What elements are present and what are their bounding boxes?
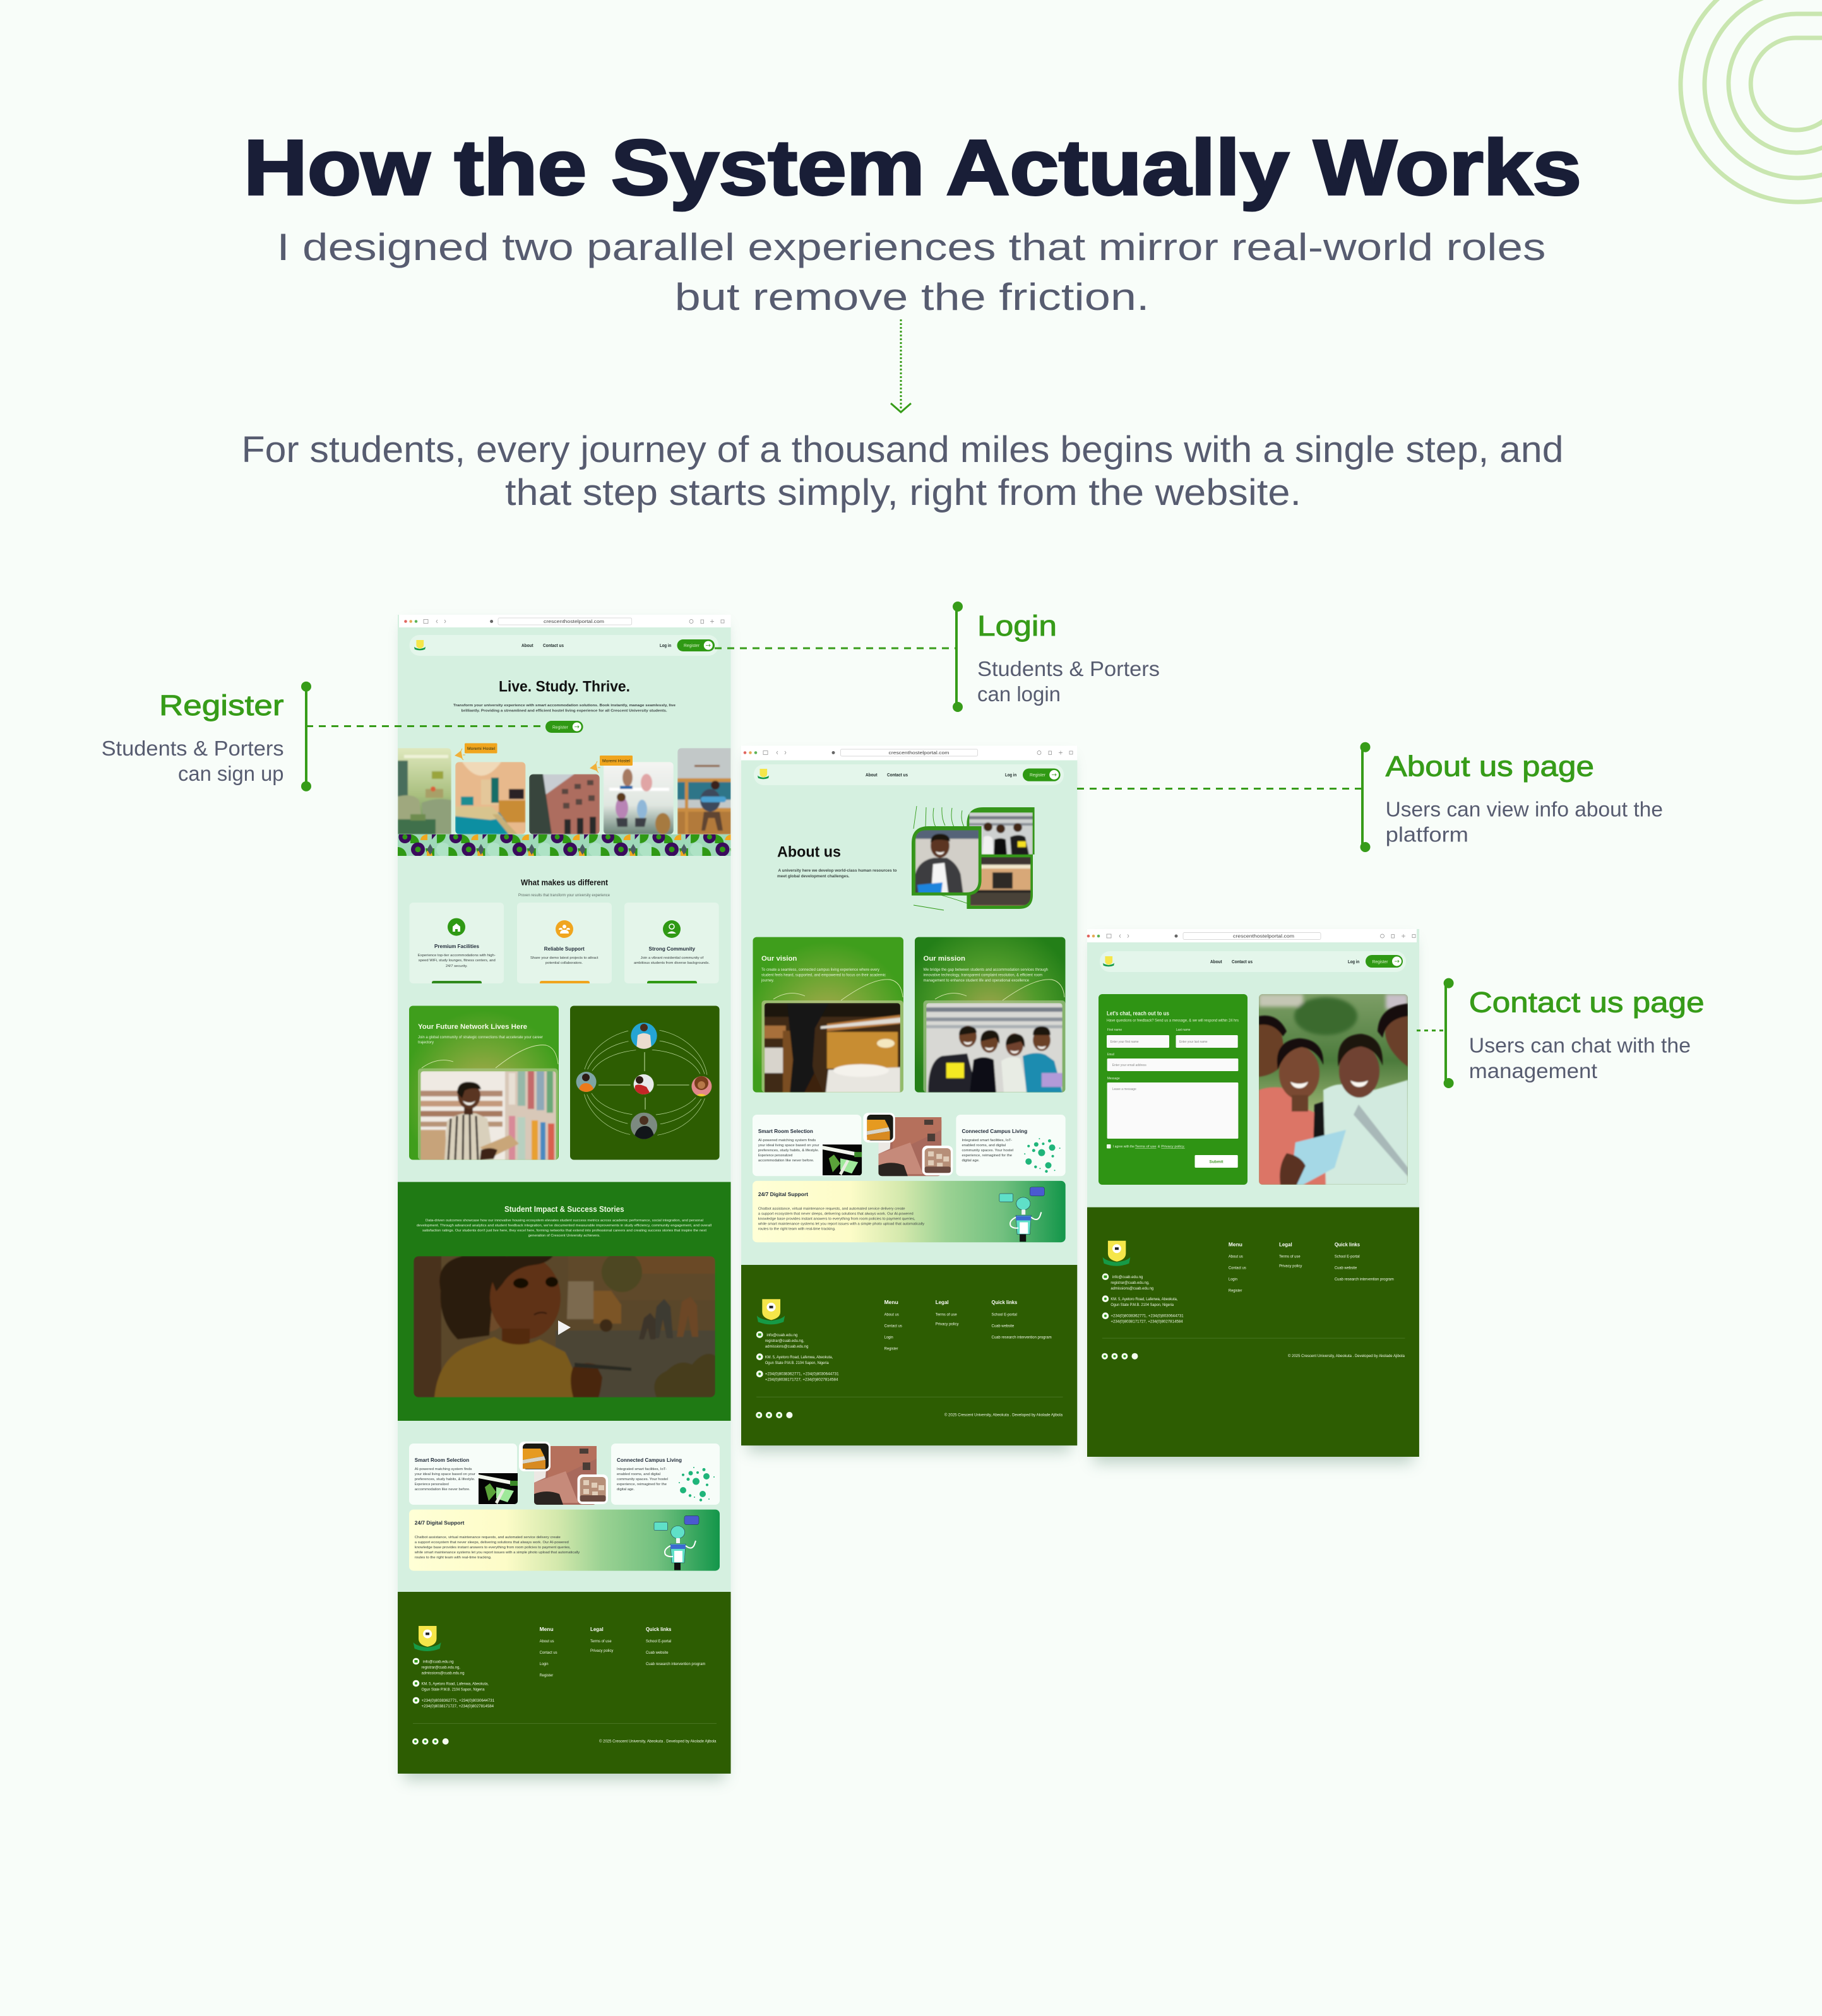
hero register button (545, 721, 583, 733)
pattern band (398, 834, 731, 856)
card: smart room selection (753, 1115, 862, 1176)
about photo collage (912, 806, 1035, 910)
photo: smiling students (1259, 994, 1408, 1185)
callout: about us page: Users can view info about the (1386, 798, 1663, 821)
callout: about us page: About us page (1386, 750, 1594, 783)
card: connected campus living: digital age. (962, 1159, 980, 1163)
card: premium facilities: Premium Facilities (434, 944, 480, 949)
contact form: Enter your last name (1179, 1040, 1208, 1044)
contact form: Terms of use (1135, 1145, 1157, 1149)
card: smart room selection: Smart Room Selection (415, 1457, 469, 1463)
card: connected campus living: experience, reimagined for the (962, 1154, 1012, 1158)
subtitle: but remove the friction. (675, 276, 1150, 318)
about text (777, 869, 897, 879)
footer (1087, 1207, 1419, 1457)
footer contact details: registrar@cuab.edu.ng, (765, 1339, 804, 1343)
card: 24/7 digital support: while smart maintenance systems let you report issues with a simple photo upload that automatically (414, 1551, 580, 1555)
card: our mission (915, 937, 1066, 1093)
footer menu links: Login (1229, 1278, 1237, 1282)
feature band (753, 1113, 1066, 1242)
tag: Moremi Hostel second: Moremi Hostel (602, 759, 630, 764)
contact form (1099, 994, 1247, 1185)
card: smart room selection: AI-powered matching system finds (758, 1139, 816, 1142)
card: our vision: journey. (761, 979, 774, 983)
footer menu links: Terms of use (590, 1639, 612, 1644)
image collage (863, 1113, 953, 1176)
about text: A university here we develop world-class human resources to (778, 869, 897, 873)
card: 24/7 digital support: routes to the right team with real-time tracking. (758, 1228, 836, 1231)
contact form: Last name (1176, 1028, 1191, 1032)
card: premium facilities: speed WiFi, study lounges, fitness centers, and (419, 959, 496, 963)
footer contact details (756, 1331, 839, 1382)
about heading: About us (777, 843, 841, 861)
contact form: & (1158, 1145, 1160, 1149)
panel: contact page mockup (1087, 929, 1419, 1463)
card: strong community: Strong Community (649, 946, 696, 952)
contact form: Enter your first name (1110, 1040, 1139, 1044)
hero text (453, 704, 676, 713)
card: network diagram (570, 1006, 720, 1160)
footer menu links: Privacy policy (936, 1322, 959, 1326)
card: smart room selection: accommodation like never before. (758, 1159, 814, 1163)
card: smart room selection: preferences, study habits, & lifestyle. (415, 1478, 475, 1481)
card: connected campus living (611, 1444, 720, 1505)
card: your future network: Your Future Network Lives Here (418, 1023, 527, 1031)
card: connected campus living: experience, reimagined for the (617, 1483, 667, 1486)
contact form: Privacy policy. (1161, 1145, 1185, 1149)
footer menu links: Contact us (1229, 1266, 1246, 1271)
hero register button: Register (552, 726, 569, 730)
section: student impact: satisfaction ratings. Our students don't just live here, they excel here, forming networks that extend into professional careers and creating success stories that inspire the next (422, 1229, 707, 1233)
section: student impact: Student Impact & Success Stories (504, 1205, 624, 1214)
card: smart room selection (409, 1444, 518, 1505)
card: connected campus living: community spaces. Your hostel (962, 1149, 1013, 1153)
card: our mission: Our mission (923, 955, 965, 963)
card: our mission: management to enhance student life and operational excellence (923, 979, 1030, 983)
footer menu links: Cuab research intervention program (1335, 1278, 1394, 1282)
navigation bar: Log in (1348, 959, 1360, 964)
footer social icons (412, 1738, 449, 1745)
card: reliable support (517, 903, 612, 983)
footer contact details: Ogun State P.M.B. 2104 Sapon, Nigeria (1110, 1303, 1174, 1307)
card: 24/7 digital support: 24/7 Digital Support (758, 1191, 808, 1197)
hero text: Transform your university experience with smart accommodation solutions. Book instantly, manage seamlessly, live (453, 704, 676, 708)
contact form: Let's chat, reach out to us (1107, 1010, 1169, 1016)
footer menu links: Register (884, 1347, 898, 1351)
footer (741, 1265, 1077, 1445)
footer social icons (1102, 1353, 1138, 1360)
hostel photo strip (398, 748, 731, 834)
feature band (409, 1442, 720, 1571)
footer menu links: Quick links (1335, 1242, 1361, 1248)
contact form: Enter your email address (1112, 1064, 1146, 1067)
navigation bar: Log in (1005, 772, 1017, 778)
footer contact details: admissions@cuab.edu.ng (765, 1344, 809, 1349)
callout: login: can login (977, 682, 1061, 706)
footer contact details: info@cuab.edu.ng (766, 1333, 798, 1337)
footer contact details: KM. 5, Ayetoro Road, Lafenwa, Abeokuta, (1110, 1297, 1178, 1302)
card: premium facilities: Experience top-tier accommodations with high- (418, 954, 496, 958)
navigation bar: Register (1030, 773, 1046, 778)
section: student impact (398, 1182, 731, 1421)
card: connected campus living: Connected Campus Living (962, 1128, 1027, 1134)
card: strong community: Join a vibrant residential community of (641, 956, 704, 960)
card: connected campus living: Integrated smart facilities, IoT- (962, 1139, 1012, 1142)
footer copyright: © 2025 Crescent University, Abeokuta . Developed by Akolade Ajibola (1288, 1354, 1405, 1358)
section heading: what makes us different (518, 879, 610, 898)
footer menu links: Register (540, 1673, 553, 1678)
callout: login: Students & Porters (977, 657, 1160, 680)
callout: about us page: platform (1386, 823, 1468, 846)
footer menu links: Cuab website (1335, 1266, 1357, 1271)
footer menu links: Contact us (884, 1324, 902, 1328)
footer menu links: Quick links (646, 1627, 672, 1632)
title: How the System Actually Works (244, 124, 1581, 211)
tag: Moremi Hostel: Moremi Hostel (467, 747, 495, 751)
footer logo (414, 1626, 441, 1651)
navigation bar: About (521, 643, 533, 648)
card: our vision: To create a seamless, connected campus living experience where every (761, 968, 879, 972)
footer contact details: +234(0)8038171727, +234(0)8027814584 (1110, 1320, 1183, 1324)
footer (398, 1592, 731, 1774)
footer menu links: Legal (590, 1627, 604, 1632)
callout: contact us page: Users can chat with the (1469, 1033, 1691, 1057)
contact form: I agree with the (1113, 1145, 1134, 1149)
footer contact details: Ogun State P.M.B. 2104 Sapon, Nigeria (765, 1361, 829, 1365)
intro text for students (241, 429, 1563, 513)
footer menu links: About us (1229, 1255, 1243, 1259)
card: 24/7 digital support: Chatbot assistance, virtual maintenance requests, and automated service delivery create (758, 1207, 905, 1211)
panel: register page mockup (398, 615, 731, 1780)
section heading: what makes us different: What makes us different (521, 879, 609, 887)
footer copyright: © 2025 Crescent University, Abeokuta . Developed by Akolade Ajibola (599, 1740, 717, 1743)
footer contact details: +234(0)8038171727, +234(0)8027814584 (765, 1378, 838, 1382)
section: student impact: Data-driven outcomes showcase how our innovative housing ecosystem elevates student success metrics across academic performance, social integration, and personal (426, 1219, 703, 1223)
card: smart room selection: AI-powered matching system finds (415, 1468, 472, 1471)
card: strong community: ambitious students from diverse backgrounds. (634, 961, 710, 965)
footer contact details: admissions@cuab.edu.ng (1110, 1286, 1154, 1291)
card: smart room selection: preferences, study habits, & lifestyle. (758, 1149, 819, 1153)
card: 24/7 digital support: knowledge base provides instant answers to everything from room policies to payment queries, (758, 1218, 915, 1221)
footer menu links (540, 1627, 705, 1678)
card: premium facilities: 24/7 security. (446, 964, 468, 968)
panel: about page mockup (741, 746, 1077, 1452)
footer contact details (1102, 1273, 1184, 1324)
footer logo (1103, 1241, 1130, 1266)
footer menu links: Menu (1229, 1242, 1242, 1248)
card: connected campus living: community spaces. Your hostel (617, 1478, 668, 1481)
footer menu links: Cuab research intervention program (992, 1335, 1052, 1339)
footer contact details: registrar@cuab.edu.ng, (1110, 1281, 1150, 1285)
footer menu links (1229, 1242, 1394, 1293)
arrow: dotted down (891, 319, 911, 412)
card: 24/7 digital support (409, 1510, 720, 1571)
footer menu links: Menu (540, 1627, 554, 1632)
card: our vision (753, 937, 903, 1093)
card: 24/7 digital support: a support ecosystem that never sleeps, delivering solutions that always work. Our AI-powered (415, 1541, 569, 1545)
card: your future network (409, 1006, 559, 1160)
navigation bar: Contact us (887, 772, 908, 778)
section heading: what makes us different: Proven results that transform your university experience (518, 894, 610, 898)
callout: register: Register (159, 689, 284, 721)
navigation bar: Register (1372, 960, 1388, 964)
footer social icons (756, 1412, 792, 1418)
card: reliable support: Share your demo latest projects to attract (530, 956, 598, 960)
image collage (519, 1442, 608, 1505)
footer contact details: KM. 5, Ayetoro Road, Lafenwa, Abeokuta, (422, 1681, 489, 1687)
card: connected campus living: Integrated smart facilities, IoT- (617, 1468, 667, 1471)
hero text: brilliantly. Providing a streamlined and efficient hostel living experience for all Crescent University students. (461, 709, 667, 713)
footer contact details: admissions@cuab.edu.ng (422, 1671, 465, 1675)
footer menu links: Login (884, 1335, 893, 1339)
footer menu links: Contact us (540, 1651, 557, 1655)
contact form: Leave a message (1112, 1088, 1136, 1091)
footer menu links (884, 1300, 1052, 1351)
footer contact details: registrar@cuab.edu.ng, (422, 1665, 460, 1670)
footer menu links: Cuab website (992, 1324, 1015, 1328)
card: connected campus living: enabled rooms, and digital (617, 1473, 660, 1476)
card: 24/7 digital support: routes to the right team with real-time tracking. (415, 1556, 492, 1560)
card: your future network: trajectory (418, 1041, 434, 1045)
icon: robot (999, 1187, 1044, 1242)
footer menu links: Login (540, 1662, 549, 1666)
navigation bar: About (1210, 959, 1222, 964)
section: student impact: generation of Crescent University achievers. (528, 1234, 600, 1238)
card: 24/7 digital support (753, 1181, 1066, 1242)
card: reliable support: Reliable Support (544, 946, 585, 952)
footer menu links: School E-portal (992, 1312, 1017, 1317)
navigation bar (1100, 951, 1406, 972)
callout: about us page (1077, 742, 1663, 852)
footer logo (757, 1299, 785, 1324)
footer contact details: info@cuab.edu.ng (1112, 1275, 1143, 1279)
card: smart room selection: Experience personalized (758, 1154, 792, 1158)
card: 24/7 digital support: a support ecosystem that never sleeps, delivering solutions that always work. Our AI-powered (758, 1212, 914, 1216)
contact form: First name (1107, 1028, 1122, 1032)
tag: Moremi Hostel (455, 744, 497, 760)
card: connected campus living: enabled rooms, and digital (962, 1144, 1006, 1147)
footer menu links: Privacy policy (1279, 1264, 1302, 1269)
footer menu links: Privacy policy (590, 1649, 614, 1653)
navigation bar: Contact us (543, 643, 564, 648)
card: our vision: Our vision (761, 955, 797, 963)
subtitle: I designed two parallel experiences that mirror real-world roles (277, 226, 1545, 268)
browser bar (1087, 929, 1417, 942)
browser bar: crescenthostelportal.com (889, 751, 950, 756)
browser bar: crescenthostelportal.com (544, 620, 604, 624)
card: 24/7 digital support: while smart maintenance systems let you report issues with a simple photo upload that automatically (758, 1223, 924, 1226)
card: premium facilities (409, 903, 504, 983)
navigation bar: Contact us (1232, 959, 1253, 964)
navigation bar (754, 764, 1064, 785)
footer menu links: Cuab website (646, 1651, 669, 1655)
browser bar (741, 746, 1077, 760)
callout: login (715, 602, 1160, 712)
footer contact details: +234(0)8038362771, +234(0)8030644731 (1110, 1314, 1184, 1319)
footer menu links: Terms of use (936, 1312, 957, 1317)
about text: meet global development challenges. (777, 874, 850, 879)
card: our mission: innovative technology, transparent complaint resolution, & efficient room (923, 973, 1042, 977)
card: 24/7 digital support: 24/7 Digital Support (415, 1519, 465, 1526)
card: strong community (624, 903, 719, 983)
callout: register (102, 682, 545, 792)
section: student impact: development. Through advanced analytics and student feedback integration, we've documented measurable improvements in study efficiency, community engagement, and overall (417, 1224, 712, 1228)
callout: register: Students & Porters (102, 737, 284, 760)
callout: contact us page: management (1469, 1059, 1597, 1082)
navigation bar: Log in (660, 643, 672, 648)
footer contact details (413, 1658, 495, 1709)
callout: register: can sign up (178, 762, 284, 785)
subtitle (277, 226, 1545, 318)
card: smart room selection: accommodation like never before. (415, 1488, 470, 1491)
browser bar: crescenthostelportal.com (1233, 934, 1294, 939)
footer menu links: Terms of use (1279, 1255, 1301, 1259)
footer contact details: info@cuab.edu.ng (423, 1660, 454, 1664)
card: connected campus living: digital age. (617, 1488, 634, 1491)
contact form: Submit (1210, 1160, 1224, 1164)
browser bar (399, 615, 731, 627)
card: our mission: We bridge the gap between students and accommodation services through (923, 968, 1048, 972)
card: 24/7 digital support: knowledge base provides instant answers to everything from room policies to payment queries, (415, 1546, 571, 1550)
contact form: Have questions or feedback? Send us a message, & we will respond within 24 hrs (1107, 1019, 1239, 1023)
footer menu links: Legal (936, 1300, 949, 1305)
callout: contact us page (1417, 978, 1705, 1088)
footer contact details: +234(0)8038171727, +234(0)8027814584 (422, 1704, 494, 1709)
tag: Moremi Hostel second (590, 756, 633, 773)
footer menu links: School E-portal (1335, 1255, 1360, 1259)
footer contact details: Ogun State P.M.B. 2104 Sapon, Nigeria (422, 1688, 485, 1692)
footer menu links: School E-portal (646, 1639, 671, 1644)
card: smart room selection: Experience personalized (415, 1483, 449, 1486)
footer contact details: +234(0)8038362771, +234(0)8030644731 (422, 1699, 495, 1703)
footer menu links: Register (1229, 1289, 1242, 1293)
footer contact details: KM. 5, Ayetoro Road, Lafenwa, Abeokuta, (765, 1355, 833, 1360)
intro text for students: that step starts simply, right from the website. (505, 472, 1301, 513)
card: reliable support: potential collaborators. (545, 961, 583, 965)
card: smart room selection: your ideal living space based on your (758, 1144, 819, 1147)
hero heading: Live. Study. Thrive. (499, 678, 630, 696)
card: our vision: student feels heard, supported, and empowered to focus on their academic (761, 973, 886, 977)
contact form: Email (1107, 1053, 1114, 1057)
footer menu links: Cuab research intervention program (646, 1662, 705, 1666)
footer copyright: © 2025 Crescent University, Abeokuta . Developed by Akolade Ajibola (944, 1413, 1063, 1417)
card: smart room selection: your ideal living space based on your (415, 1473, 475, 1476)
footer menu links: About us (540, 1639, 554, 1644)
footer menu links: Legal (1279, 1242, 1292, 1248)
card: connected campus living: Connected Campus Living (617, 1457, 682, 1463)
callout: contact us page: Contact us page (1469, 986, 1705, 1019)
card: 24/7 digital support: Chatbot assistance, virtual maintenance requests, and automated service delivery create (415, 1536, 561, 1539)
footer menu links: About us (884, 1312, 899, 1317)
intro text for students: For students, every journey of a thousand miles begins with a single step, and (241, 429, 1563, 470)
navigation bar: Register (684, 644, 700, 648)
footer contact details: +234(0)8038362771, +234(0)8030644731 (765, 1372, 839, 1377)
footer menu links: Menu (884, 1300, 898, 1305)
card: your future network: Join a global community of strategic connections that accelerate your career (418, 1036, 543, 1040)
navigation bar (410, 635, 718, 656)
video thumbnail (414, 1252, 715, 1397)
callout: login: Login (977, 610, 1057, 642)
card: connected campus living (956, 1115, 1066, 1176)
footer menu links: Quick links (992, 1300, 1018, 1305)
contact form: Message (1107, 1077, 1120, 1081)
icon: robot (654, 1515, 699, 1570)
decorative concentric rings (1681, 0, 1822, 202)
navigation bar: About (866, 772, 878, 778)
card: smart room selection: Smart Room Selection (758, 1128, 813, 1134)
